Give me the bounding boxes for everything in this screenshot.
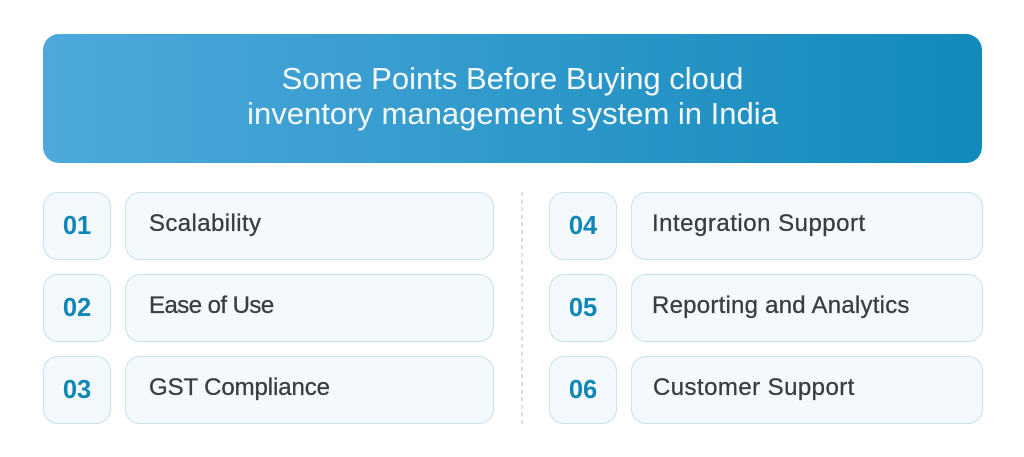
divider <box>521 192 523 424</box>
number 04: 04 <box>569 212 597 240</box>
item: GST Compliance <box>125 356 494 424</box>
number 05: 05 <box>569 294 597 322</box>
item: Customer Support: Customer Support <box>653 374 855 401</box>
number 01 <box>43 192 111 260</box>
item: Ease of Use <box>125 274 494 342</box>
item: Reporting and Analytics <box>631 274 983 342</box>
number 02: 02 <box>63 294 91 322</box>
number 01: 01 <box>63 212 91 240</box>
title banner: Some Points Before Buying cloud <box>282 61 743 96</box>
number 03 <box>43 356 111 424</box>
item: Scalability <box>125 192 494 260</box>
item: GST Compliance: GST Compliance <box>149 374 330 401</box>
item: Integration Support: Integration Support <box>652 210 866 237</box>
number 03: 03 <box>63 376 91 404</box>
item: Integration Support <box>631 192 983 260</box>
item: Scalability: Scalability <box>149 210 261 237</box>
item: Ease of Use: Ease of Use <box>149 292 274 319</box>
title banner <box>43 34 982 163</box>
number 06: 06 <box>569 376 597 404</box>
item: Customer Support <box>631 356 983 424</box>
number 04 <box>549 192 617 260</box>
number 06 <box>549 356 617 424</box>
title banner: inventory management system in India <box>247 96 778 131</box>
item: Reporting and Analytics: Reporting and Analytics <box>652 292 910 319</box>
number 02 <box>43 274 111 342</box>
number 05 <box>549 274 617 342</box>
